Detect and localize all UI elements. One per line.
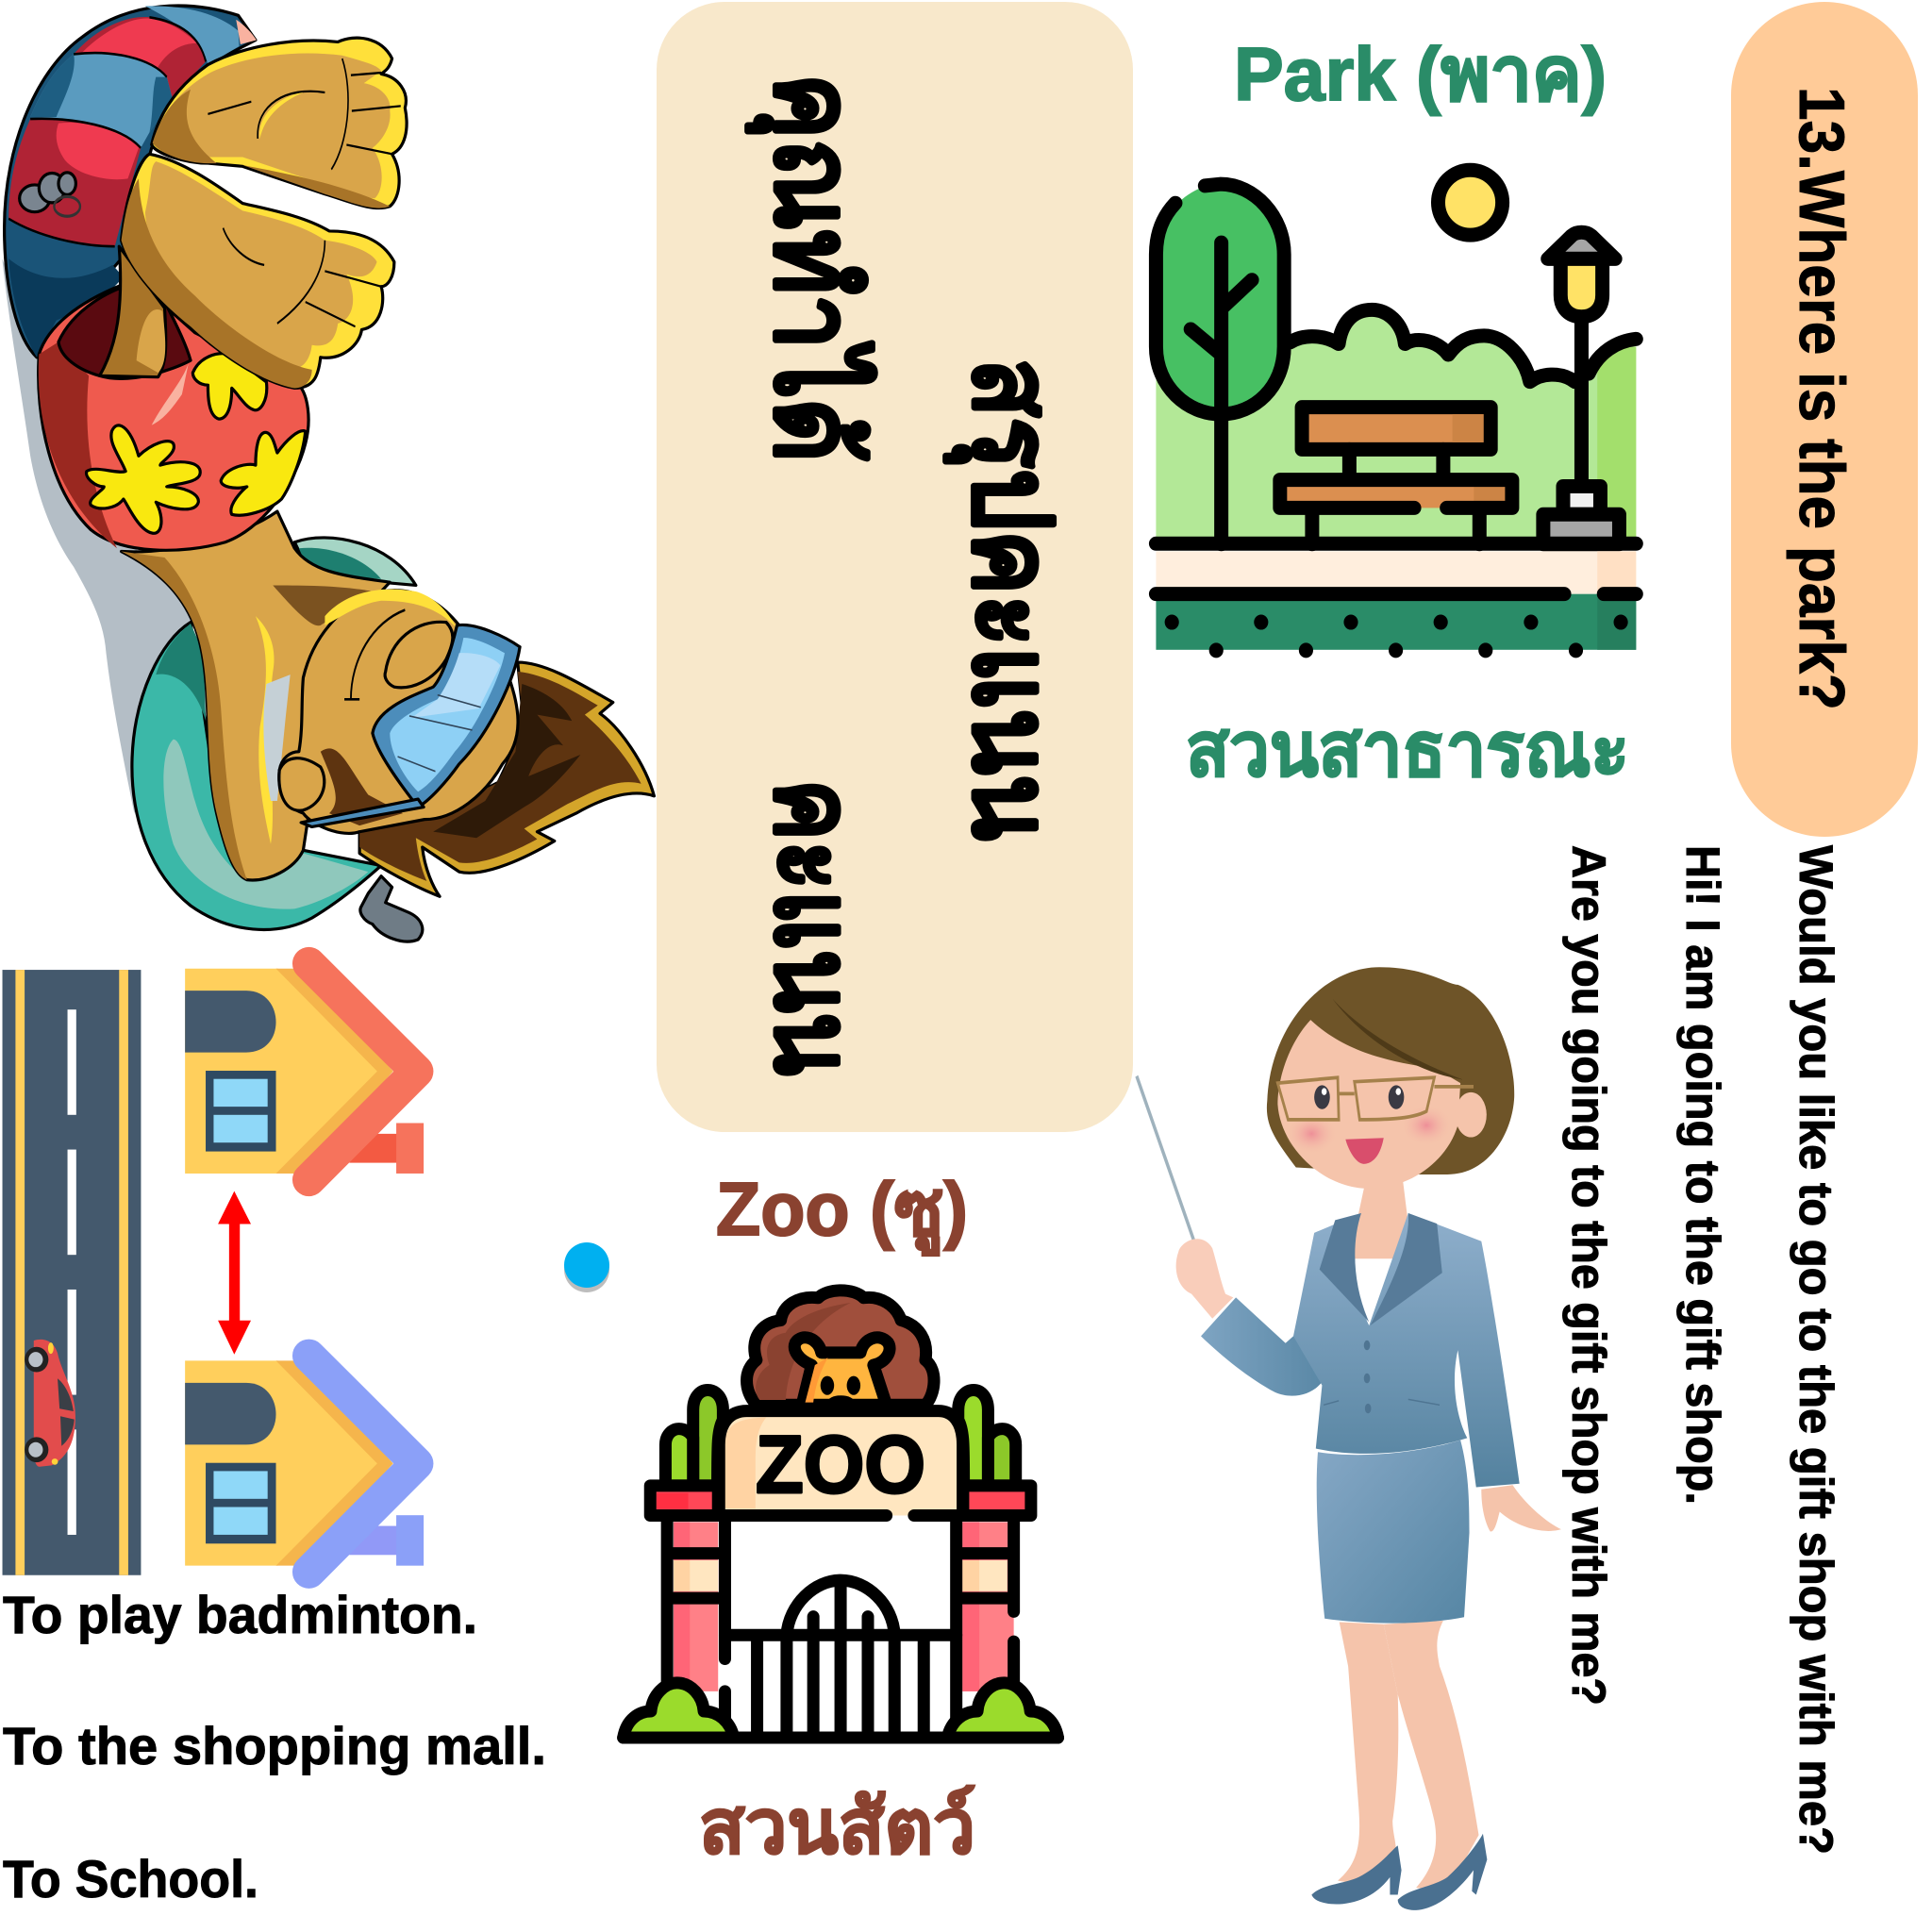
answer choices — [3, 1585, 546, 1908]
caption: public park: สวนสาธารณะ — [1186, 708, 1629, 791]
answer: school: To School. — [3, 1849, 258, 1908]
dialogue: would you like: Would you like to go to the gift shop with me? — [1790, 845, 1842, 1855]
icon: road with car — [3, 970, 141, 1575]
question pill — [1731, 2, 1918, 837]
icon: blue house — [185, 1356, 424, 1572]
icon: red car — [25, 1340, 75, 1467]
question heading: 13.Where is the park? — [1786, 87, 1857, 710]
answer: shopping mall: To the shopping mall. — [3, 1716, 546, 1775]
illustration: character in swim ring — [2, 6, 654, 941]
text: points: คะแนน — [753, 779, 875, 1075]
caption: zoo thai: สวนสัตว์ — [699, 1785, 975, 1869]
dialogue: are you going: Are you going to the gift shop with me? — [1562, 845, 1615, 1706]
arrow: between houses — [218, 1191, 251, 1355]
illustration: teacher with pointer — [1137, 967, 1561, 1910]
marker: blue dot — [564, 1242, 609, 1292]
icon: coral house — [185, 963, 424, 1180]
text: you scored: คุณทำได้ — [746, 74, 876, 462]
zoo sign lettering: ZOO — [756, 1420, 925, 1510]
heading: summary: สรุปคะแนน — [944, 358, 1074, 841]
dialogue: going to gift shop: Hi! I am going to the gift shop. — [1676, 845, 1729, 1505]
icon: park with bench — [1156, 170, 1636, 658]
panel: score summary — [657, 2, 1133, 1132]
heading: park: Park (พาค) — [1234, 32, 1607, 116]
heading: zoo: Zoo (ซู) — [716, 1167, 968, 1257]
answer: badminton: To play badminton. — [3, 1585, 477, 1644]
icon: zoo gate — [624, 1291, 1058, 1738]
